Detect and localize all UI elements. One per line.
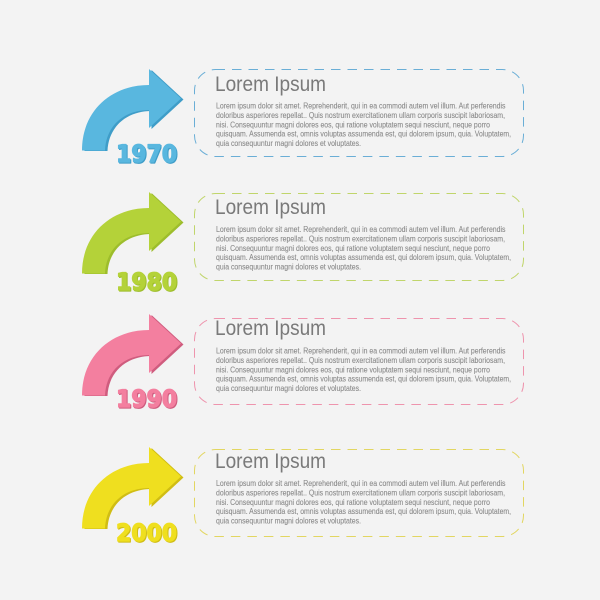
body text 1970: quisquam. Assumenda est, omnis voluptas assumenda est, qui dolorem ipsum, quia. Voluptatem, bbox=[216, 129, 511, 139]
year 2000: 2000 bbox=[117, 520, 178, 548]
body text 1990: nisi. Consequuntur magni dolores eos, qui ratione voluptatem sequi nesciunt, neque porro bbox=[216, 364, 490, 374]
year 1990: 1990 bbox=[116, 385, 177, 413]
year 1970: 1970 bbox=[116, 140, 177, 168]
body text 2000: Lorem ipsum dolor sit amet. Reprehenderit, qui in ea commodi autem vel illum. Aut perferendis bbox=[216, 478, 506, 488]
year 1980: 1980 bbox=[116, 268, 177, 296]
dashed text box 2000 bbox=[194, 450, 524, 536]
body text 1970: Lorem ipsum dolor sit amet. Reprehenderit, qui in ea commodi autem vel illum. Aut perferendis bbox=[216, 100, 506, 110]
body text 1970: quia consequuntur magni dolores et voluptates. bbox=[216, 138, 361, 148]
year 1970: 1970 bbox=[117, 141, 178, 169]
body text 1990: doloribus asperiores repellat.. Quis nostrum exercitationem ullam corporis suscipit laboriosam, bbox=[216, 355, 505, 365]
heading 1980: Lorem Ipsum bbox=[215, 196, 326, 219]
body text 1990 bbox=[216, 346, 511, 393]
body text 2000: nisi. Consequuntur magni dolores eos, qui ratione voluptatem sequi nesciunt, neque porro bbox=[216, 497, 490, 507]
year 1980: 1980 bbox=[117, 269, 178, 297]
heading 2000: Lorem Ipsum bbox=[215, 450, 326, 473]
body text 2000: quia consequuntur magni dolores et voluptates. bbox=[216, 516, 361, 526]
dashed text box 1970 bbox=[194, 70, 524, 156]
timeline row 1970 bbox=[82, 69, 524, 169]
body text 1980: doloribus asperiores repellat.. Quis nostrum exercitationem ullam corporis suscipit laboriosam, bbox=[216, 234, 505, 244]
year 1990: 1990 bbox=[117, 386, 178, 414]
body text 1990: Lorem ipsum dolor sit amet. Reprehenderit, qui in ea commodi autem vel illum. Aut perferendis bbox=[216, 346, 506, 356]
dashed text box 1990 bbox=[194, 318, 524, 404]
timeline row 1990 bbox=[82, 314, 524, 414]
body text 1980 bbox=[216, 224, 511, 272]
arrow 1990 bbox=[82, 314, 184, 396]
body text 2000 bbox=[216, 478, 511, 526]
body text 1970: nisi. Consequuntur magni dolores eos, qui ratione voluptatem sequi nesciunt, neque porro bbox=[216, 119, 490, 129]
body text 2000: quisquam. Assumenda est, omnis voluptas assumenda est, qui dolorem ipsum, quia. Voluptatem, bbox=[216, 506, 511, 516]
body text 1980: quisquam. Assumenda est, omnis voluptas assumenda est, qui dolorem ipsum, quia. Voluptatem, bbox=[216, 252, 511, 262]
timeline row 1980 bbox=[82, 192, 524, 297]
arrow 2000 bbox=[82, 447, 184, 529]
body text 1970 bbox=[216, 100, 511, 148]
body text 1980: Lorem ipsum dolor sit amet. Reprehenderit, qui in ea commodi autem vel illum. Aut perferendis bbox=[216, 224, 506, 234]
body text 1970: doloribus asperiores repellat.. Quis nostrum exercitationem ullam corporis suscipit laboriosam, bbox=[216, 110, 505, 120]
body text 1980: nisi. Consequuntur magni dolores eos, qui ratione voluptatem sequi nesciunt, neque porro bbox=[216, 243, 490, 253]
timeline row 2000 bbox=[82, 447, 524, 548]
body text 1990: quisquam. Assumenda est, omnis voluptas assumenda est, qui dolorem ipsum, quia. Voluptatem, bbox=[216, 374, 511, 384]
heading 1970: Lorem Ipsum bbox=[215, 73, 326, 96]
body text 2000: doloribus asperiores repellat.. Quis nostrum exercitationem ullam corporis suscipit laboriosam, bbox=[216, 488, 505, 498]
body text 1980: quia consequuntur magni dolores et voluptates. bbox=[216, 262, 361, 272]
heading 1990: Lorem Ipsum bbox=[215, 317, 326, 340]
body text 1990: quia consequuntur magni dolores et voluptates. bbox=[216, 383, 361, 393]
dashed text box 1980 bbox=[194, 194, 524, 280]
arrow 1970 bbox=[82, 69, 184, 151]
arrow 1980 bbox=[82, 192, 184, 274]
year 2000: 2000 bbox=[116, 519, 177, 547]
